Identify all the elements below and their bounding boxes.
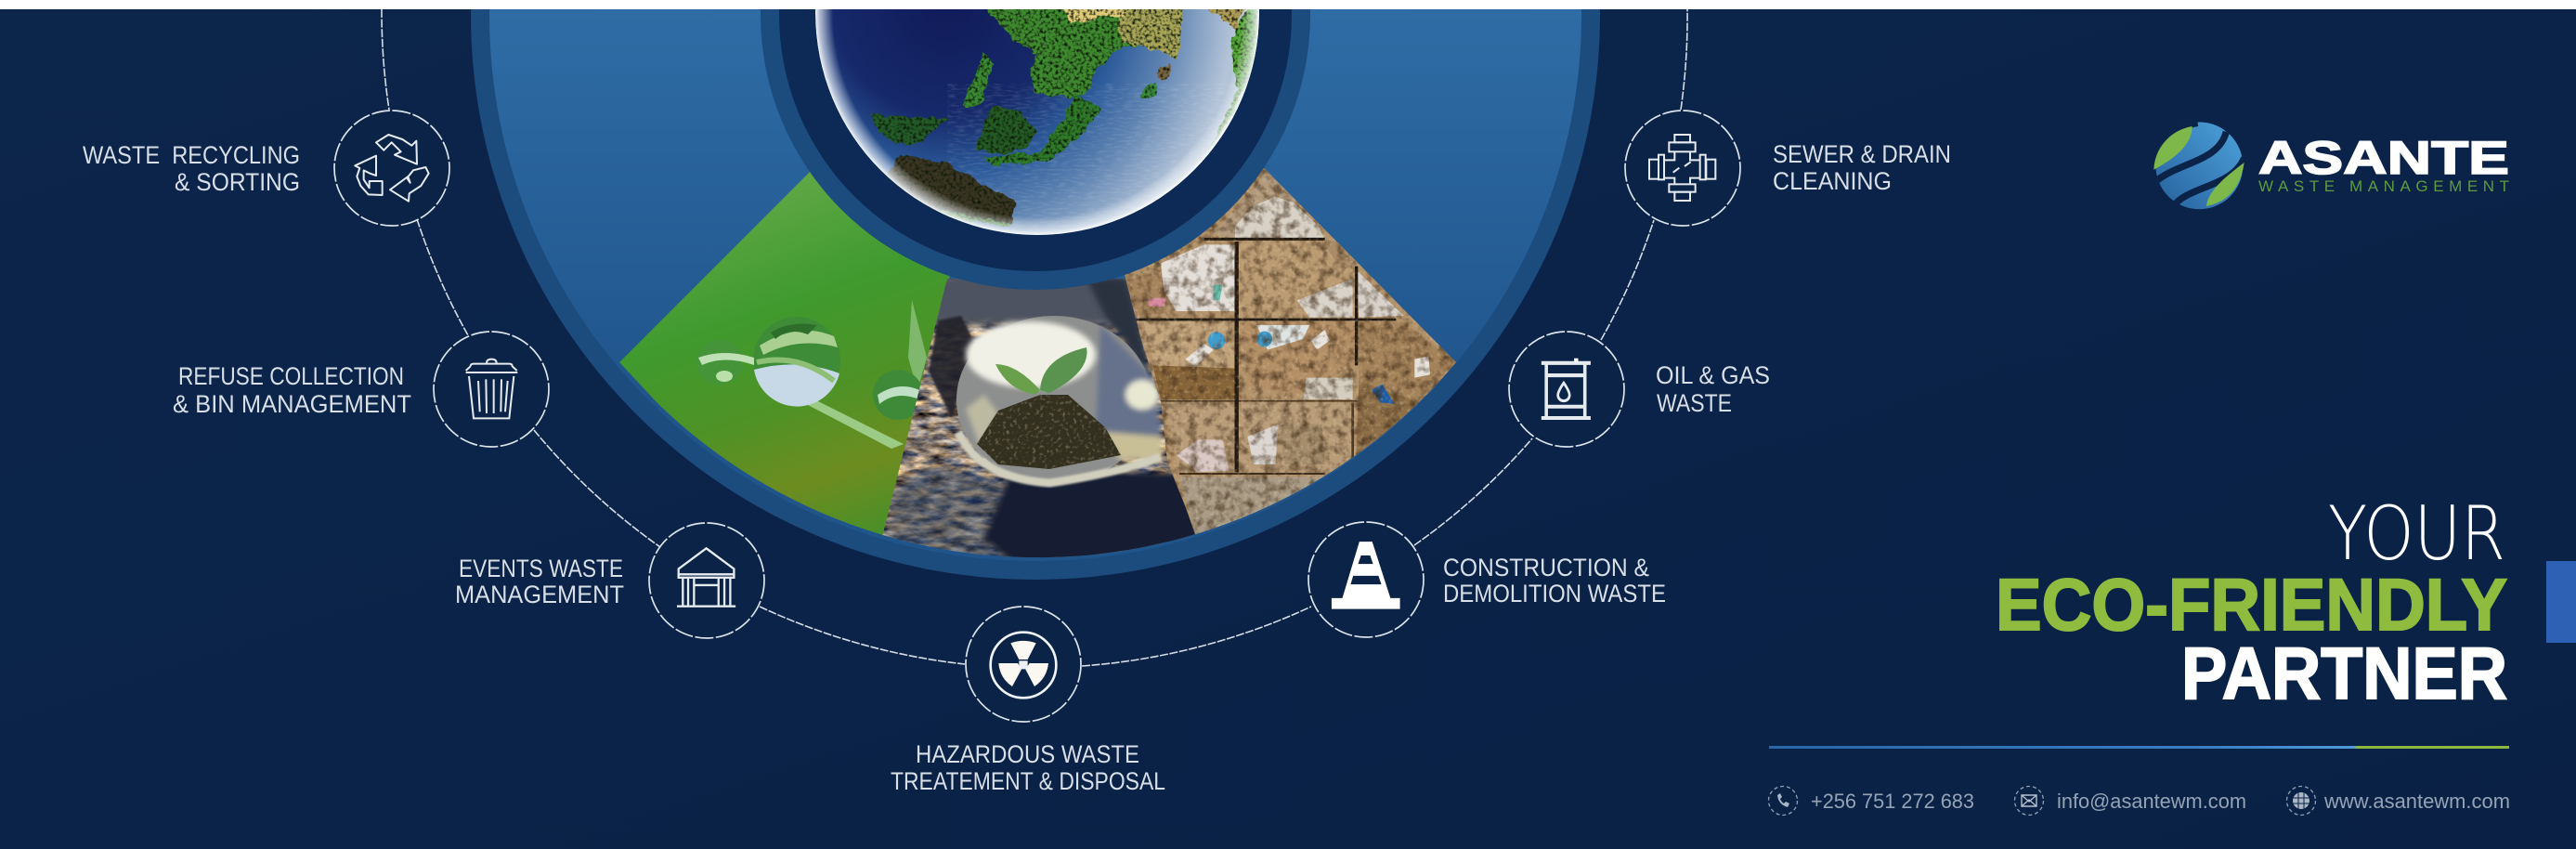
logo tagline: WASTE MANAGEMENT bbox=[2258, 177, 2509, 195]
label: TREATEMENT & DISPOSAL bbox=[891, 767, 1165, 795]
label: OIL & GAS bbox=[1656, 361, 1770, 389]
label: WASTE bbox=[1657, 389, 1732, 417]
website bbox=[2286, 786, 2510, 816]
node: oil and gas bbox=[1509, 332, 1770, 447]
label: EVENTS WASTE bbox=[459, 555, 623, 582]
label: DEMOLITION WASTE bbox=[1443, 580, 1666, 607]
website: www.asantewm.com bbox=[2323, 790, 2510, 813]
label: CONSTRUCTION & bbox=[1443, 554, 1649, 581]
icon: radiation bbox=[991, 633, 1056, 698]
connector lines bbox=[382, 9, 1687, 666]
photo: cardboard bales bbox=[1125, 167, 1456, 535]
droplet large bbox=[753, 317, 840, 407]
label: HAZARDOUS WASTE bbox=[916, 740, 1139, 768]
node: construction bbox=[1308, 522, 1666, 637]
droplet small bbox=[696, 340, 754, 385]
label bbox=[173, 362, 411, 418]
photo: green leaf and droplets bbox=[619, 172, 950, 541]
node: sewer and drain bbox=[1625, 111, 1951, 226]
earth halo inner bbox=[779, 0, 1292, 271]
top white strip bbox=[0, 0, 2576, 9]
node: waste recycling bbox=[83, 111, 449, 226]
label: MANAGEMENT bbox=[455, 581, 624, 608]
large semicircle panel bbox=[471, 0, 1600, 594]
label bbox=[1656, 361, 1770, 417]
icon: bin bbox=[466, 359, 517, 418]
label bbox=[455, 555, 624, 608]
label: & SORTING bbox=[175, 168, 300, 196]
icon: barrel bbox=[1542, 359, 1591, 418]
headline: ECO-FRIENDLY bbox=[1996, 563, 2507, 646]
label bbox=[1443, 554, 1666, 607]
phone bbox=[1768, 786, 1974, 816]
icon: recycle arrows bbox=[355, 135, 429, 202]
contact row bbox=[1768, 786, 2510, 816]
label bbox=[83, 141, 300, 196]
label: CLEANING bbox=[1773, 167, 1892, 195]
node: events waste bbox=[455, 523, 764, 638]
label: REFUSE COLLECTION bbox=[178, 362, 404, 390]
icon: tent bbox=[677, 548, 735, 607]
phone: +256 751 272 683 bbox=[1811, 790, 1974, 813]
node: refuse collection bbox=[173, 332, 549, 447]
earth globe bbox=[815, 0, 1263, 242]
earth halo ring bbox=[761, 0, 1310, 290]
logo wordmark: ASANTE bbox=[2258, 132, 2509, 184]
photo: seedling in light bulb bbox=[882, 279, 1195, 557]
label: WASTE RECYCLING bbox=[83, 141, 300, 169]
label bbox=[891, 740, 1165, 795]
icon: traffic cone bbox=[1332, 542, 1400, 609]
icon: pipe junction bbox=[1649, 135, 1715, 201]
photo wedge bbox=[619, 0, 1477, 594]
logo globe mark bbox=[2152, 122, 2244, 210]
label: & BIN MANAGEMENT bbox=[173, 390, 411, 418]
headline bbox=[1996, 490, 2507, 714]
logo bbox=[2152, 122, 2509, 210]
email bbox=[2015, 786, 2246, 816]
side tab bbox=[2546, 561, 2576, 643]
headline: PARTNER bbox=[2181, 632, 2507, 714]
label: SEWER & DRAIN bbox=[1773, 140, 1951, 168]
headline: YOUR bbox=[2328, 490, 2505, 577]
node: hazardous waste bbox=[891, 607, 1165, 795]
email: info@asantewm.com bbox=[2057, 790, 2246, 813]
divider line bbox=[1769, 746, 2509, 749]
label bbox=[1773, 140, 1951, 195]
